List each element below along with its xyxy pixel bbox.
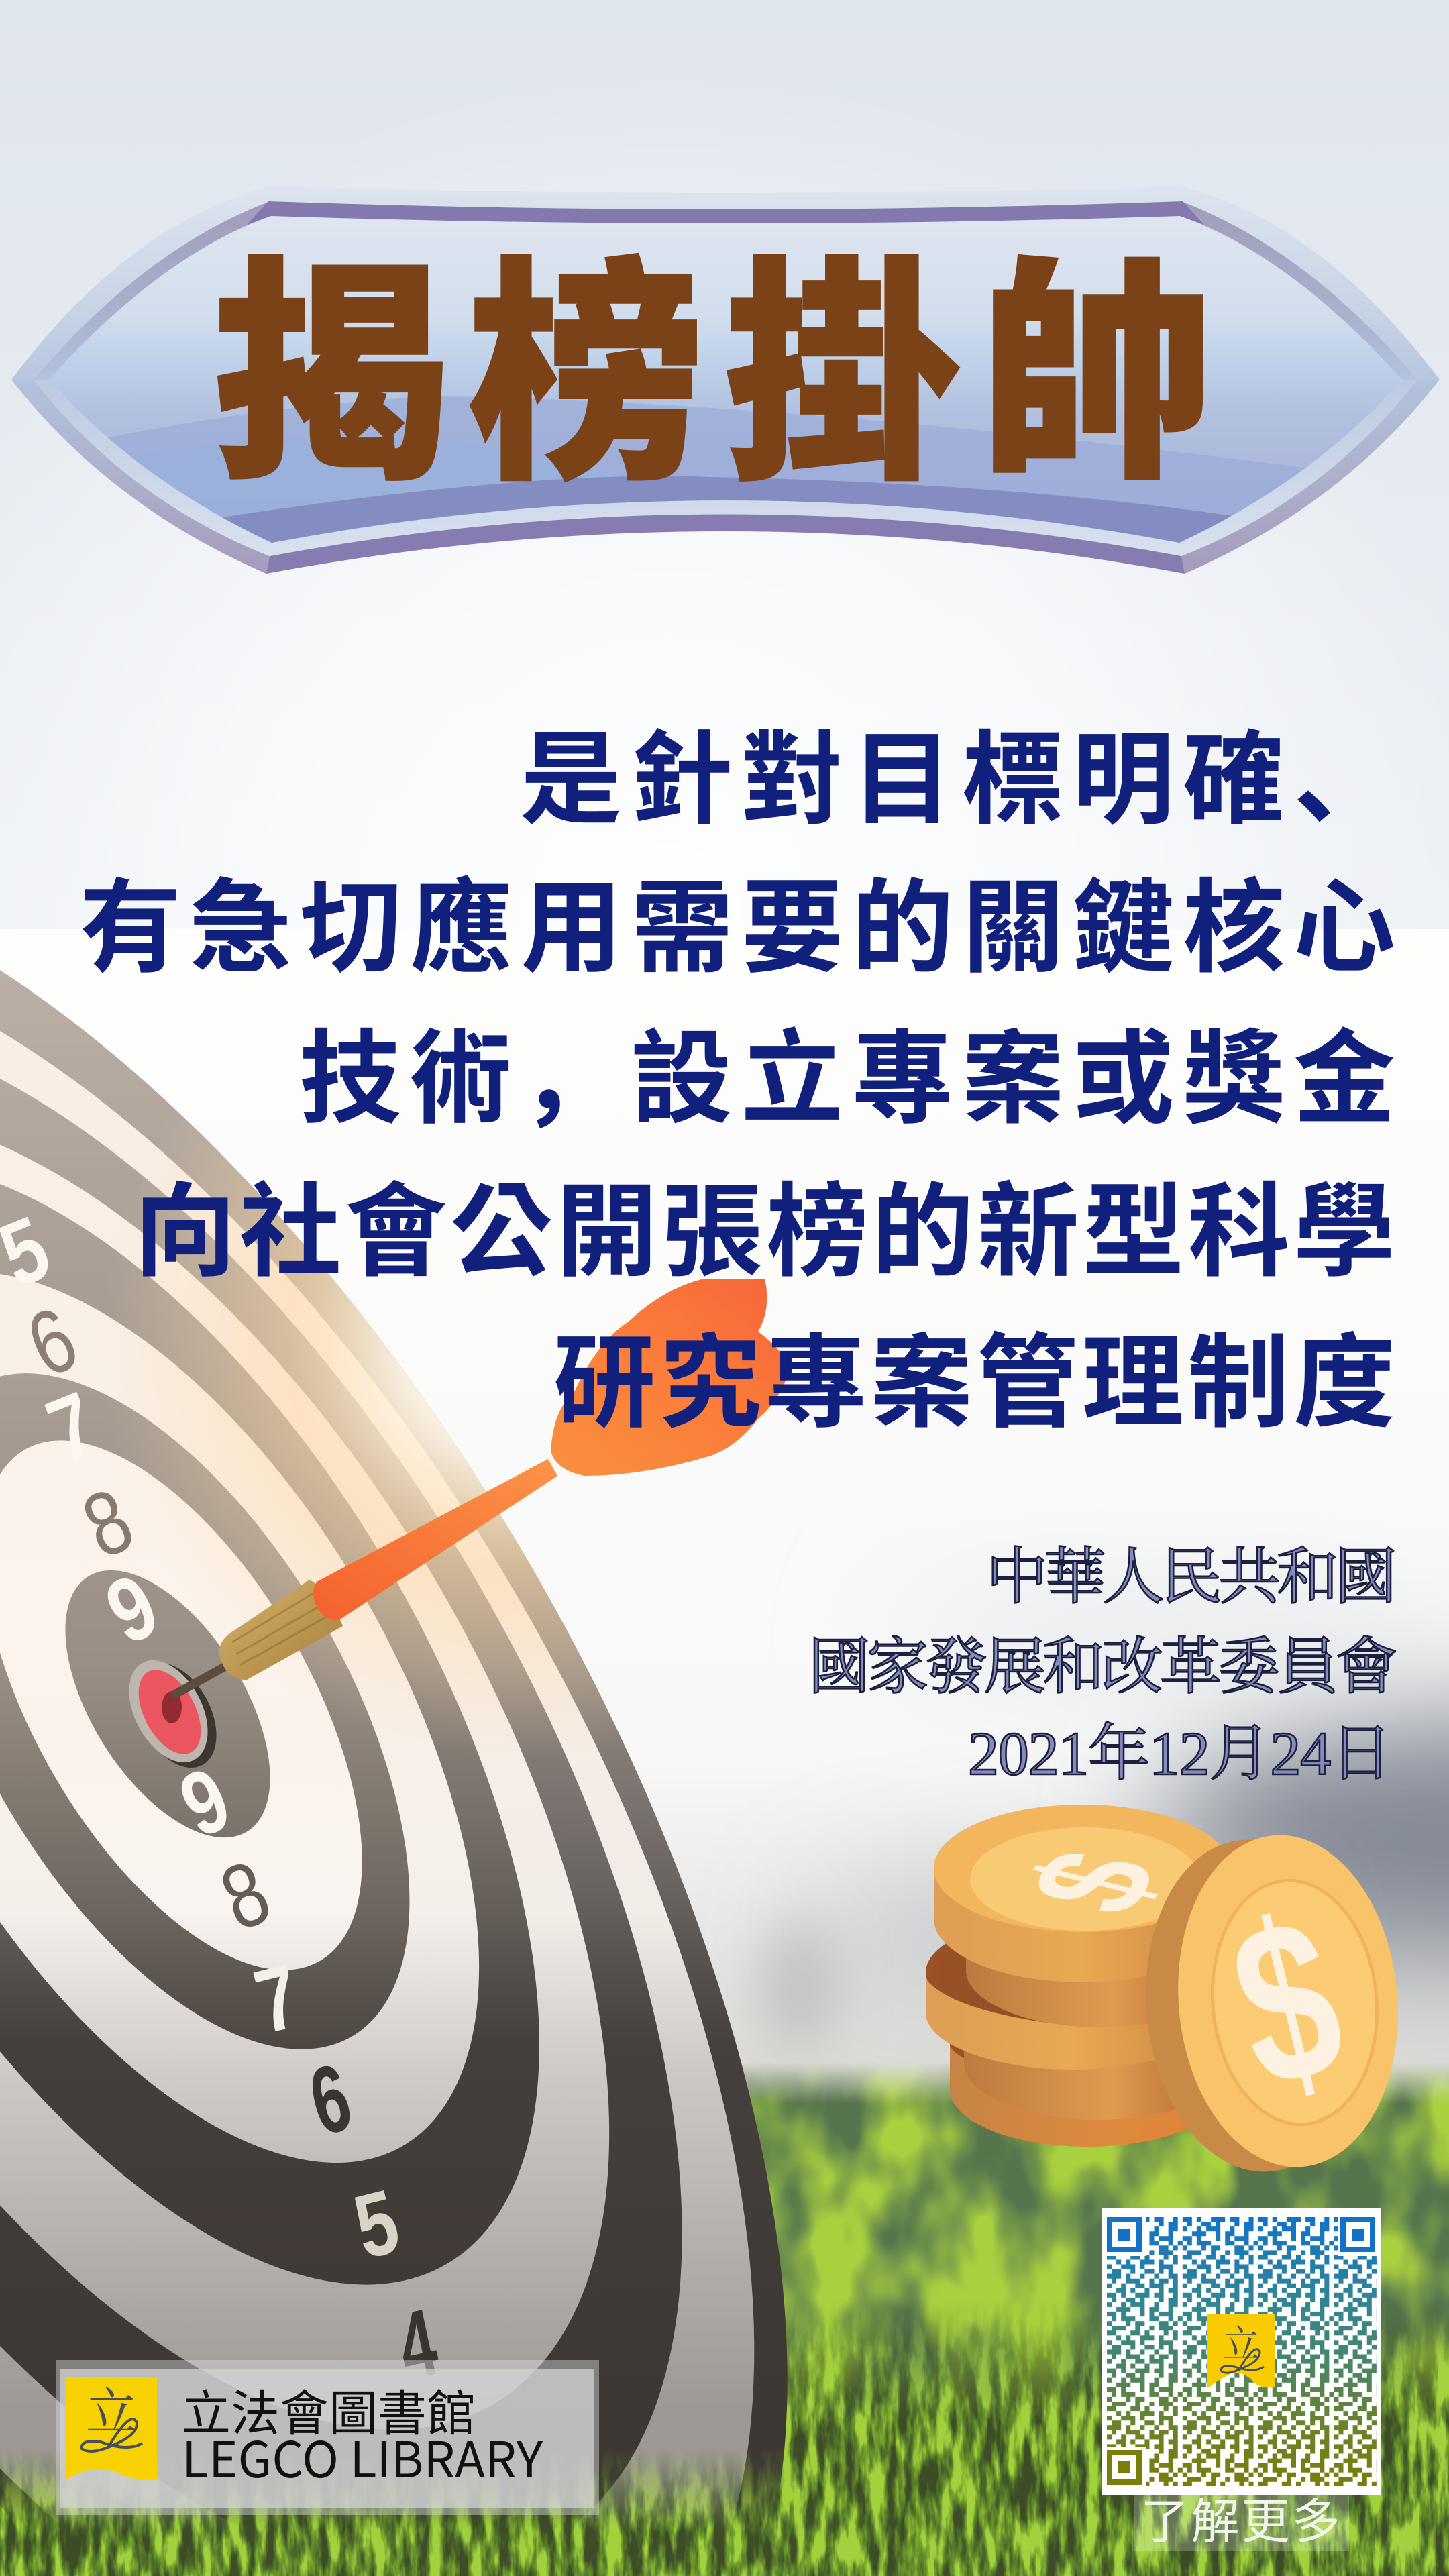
icon: bullseye — [113, 1647, 233, 1782]
QR centre logo: 立 — [1222, 2324, 1260, 2366]
library name English: LEGCO LIBRARY — [182, 2420, 543, 2492]
main description text — [79, 697, 1395, 1448]
library name Chinese: 立法會圖書館 — [182, 2374, 476, 2445]
target numbers: 6 — [13, 1287, 91, 1396]
target numbers: 8 — [68, 1468, 147, 1577]
front grass over the foot of the board — [0, 2453, 784, 2576]
main description text: 研究專案管理制度 — [553, 1300, 1395, 1448]
icon: library bookmark emblem: 立 — [86, 2385, 137, 2441]
dart shaft — [313, 1459, 557, 1621]
dollar sign on stack: $ — [994, 1837, 1193, 1927]
banner side bands — [11, 202, 272, 574]
banner top band — [247, 201, 1204, 225]
icon: gold coin stack — [926, 1805, 1234, 2147]
banner bottom band — [266, 514, 1185, 574]
target numbers: 9 — [166, 1748, 244, 1856]
main description text: 技術，設立專案或獎金 — [299, 996, 1395, 1144]
banner outer frame — [11, 186, 1440, 380]
coin 4 — [964, 1955, 1232, 2120]
banner inner panel — [49, 216, 1402, 543]
dart barrel — [219, 1580, 343, 1680]
icon: upright gold coin: $ — [1211, 1868, 1364, 2137]
target numbers: 5 — [345, 2169, 409, 2278]
target numbers — [0, 1197, 446, 2400]
dart tip — [176, 1666, 225, 1694]
source and date text: 國家發展和改革委員會 — [808, 1633, 1397, 1701]
icon: library bookmark emblem — [65, 2377, 157, 2480]
coin 2 — [966, 1872, 1234, 2027]
target numbers: 7 — [246, 1944, 309, 2053]
finder patterns — [1104, 2214, 1379, 2489]
target numbers: 8 — [207, 1841, 283, 1949]
banner shape — [11, 186, 1440, 574]
target numbers: 4 — [389, 2288, 446, 2400]
source and date text: 2021年12月24日 — [968, 1719, 1392, 1788]
QR centre logo — [1208, 2314, 1275, 2388]
icon: upright gold coin — [1132, 1826, 1411, 2181]
title: 揭榜掛帥 — [215, 184, 1215, 526]
QR code — [1102, 2208, 1381, 2495]
logo panel — [56, 2360, 599, 2515]
coin 5 — [950, 1989, 1225, 2147]
background: pale top overlay — [0, 0, 1449, 929]
source and date text — [808, 1543, 1397, 1788]
main description text: 有急切應用需要的關鍵核心 — [79, 845, 1395, 993]
learn more label: 了解更多 — [1140, 2482, 1340, 2553]
main description text: 向社會公開張榜的新型科學 — [134, 1149, 1395, 1297]
target board with rings — [0, 970, 788, 2525]
coin 1 — [934, 1805, 1230, 1982]
target numbers: 9 — [91, 1555, 173, 1664]
coin 3 — [926, 1915, 1221, 2070]
dart — [113, 1279, 790, 1782]
background: grass behind the target — [0, 2065, 1449, 2525]
target numbers: 6 — [300, 2043, 361, 2155]
source and date text: 中華人民共和國 — [986, 1543, 1397, 1611]
target numbers: 7 — [34, 1373, 111, 1482]
main description text: 是針對目標明確、 — [520, 697, 1395, 845]
dart flight — [551, 1279, 790, 1476]
